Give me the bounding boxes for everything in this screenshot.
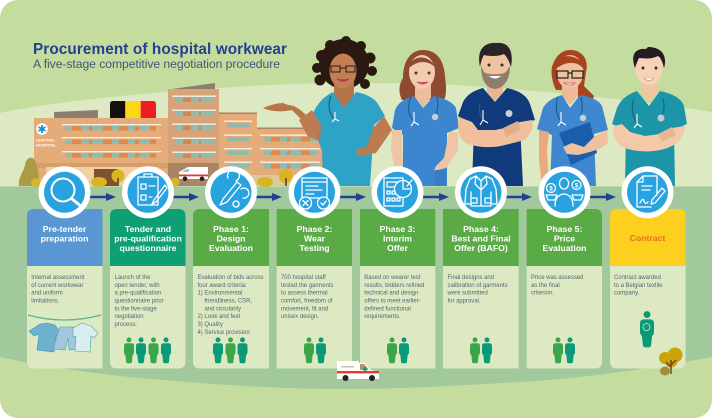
- card: contract: Contract: [630, 233, 665, 243]
- staff pictograms: [124, 337, 171, 363]
- icon: wear test checklist: [288, 166, 340, 218]
- belgian flag: [110, 101, 156, 118]
- card: phase 5: Evaluation: [543, 243, 586, 253]
- card: phase 1: 3) Quality: [198, 322, 223, 328]
- card: phase 5: Phase 5:: [547, 224, 582, 234]
- card: phase 4: Final designs and: [448, 275, 494, 281]
- hospital sign: CENTRAL: [36, 138, 56, 142]
- main wing: [34, 118, 168, 186]
- staff pictograms: [304, 337, 326, 363]
- roof: [54, 110, 98, 118]
- card: tender and pre-qualification questionnaire: [110, 209, 186, 368]
- card: tender and pre-qualification questionnaire: open tender, with: [114, 283, 160, 289]
- card: phase 3: Offer: [387, 243, 408, 253]
- card: phase 2: 700 hospital staff: [281, 275, 326, 281]
- staff pictograms: [387, 337, 409, 363]
- card: phase 5: Price was assessed: [531, 275, 583, 281]
- card: phase 3: Interim: [383, 234, 412, 244]
- tower: [172, 83, 215, 90]
- card: phase 1: 4) Service provision: [198, 330, 250, 336]
- face: [330, 54, 356, 88]
- staff pictograms: [553, 337, 575, 363]
- card: phase 2: Phase 2:: [297, 224, 332, 234]
- card: phase 3: requirements.: [364, 314, 401, 320]
- card: tender and pre-qualification questionnaire: a pre-qualification: [114, 291, 161, 297]
- card: tender and pre-qualification questionnaire: process.: [114, 322, 137, 328]
- tree near contract card: [659, 348, 682, 376]
- icon: lab coat: [455, 166, 507, 218]
- card: phase 2: Testing: [299, 243, 330, 253]
- pictogram: awarded company: [640, 311, 654, 347]
- card: pre-tender preparation: and uniform: [31, 291, 63, 297]
- nurse 4: [537, 50, 608, 186]
- card: tender and pre-qualification questionnaire: to the five-stage: [114, 306, 157, 312]
- hair: [312, 36, 377, 89]
- card: pre-tender preparation: [27, 209, 102, 368]
- hospital sign: [36, 123, 56, 148]
- card: phase 2: unisex design.: [281, 314, 319, 320]
- card: phase 1: friendliness, CSR,: [204, 298, 252, 304]
- card: phase 3: technical and design: [364, 291, 418, 297]
- card: phase 5: Price: [554, 234, 575, 244]
- card: phase 2: comfort, freedom of: [281, 298, 333, 304]
- card: contract: [610, 209, 686, 368]
- card: phase 1: Design: [217, 234, 245, 244]
- pointing arm: [263, 103, 322, 140]
- card: phase 3: defined functional: [364, 306, 411, 312]
- icon: magnifying glass: [38, 166, 90, 218]
- card: pre-tender preparation: Pre-tender: [43, 224, 87, 234]
- card: phase 2: movement, fit and: [281, 306, 328, 312]
- background hill: [0, 83, 712, 190]
- arrow: [506, 193, 532, 201]
- card: phase 2: [277, 209, 352, 368]
- card: phase 4: Phase 4:: [463, 224, 499, 234]
- nurse 3: [458, 43, 535, 186]
- clipboard: [559, 122, 597, 165]
- card: phase 1: Phase 1:: [213, 224, 249, 234]
- card: phase 4: calibration of garments: [448, 283, 508, 289]
- card: phase 4: Best and Final: [451, 234, 511, 244]
- card: phase 1: and circularity: [204, 306, 241, 312]
- card: phase 1: four award criteria:: [198, 283, 247, 289]
- card: phase 1: [193, 209, 269, 368]
- card: tender and pre-qualification questionnaire: questionnaire: [120, 243, 177, 253]
- card: phase 5: as the final: [531, 283, 560, 289]
- card: tender and pre-qualification questionnaire: questionnaire prior: [114, 298, 164, 304]
- icon: price evaluation: $: [549, 186, 553, 192]
- stethoscope: [329, 96, 333, 118]
- icon: design gears and pencil: [205, 166, 257, 218]
- card: pre-tender preparation: of current workwear: [31, 283, 83, 289]
- card: pre-tender preparation: limitations.: [31, 298, 60, 304]
- card: phase 3: Based on wearer test: [364, 275, 421, 281]
- card: phase 4: were submitted: [446, 291, 488, 297]
- arrow: [340, 193, 366, 201]
- ambulance on road: [337, 361, 379, 381]
- card: phase 1: Evaluation of bids across: [198, 275, 264, 281]
- illustration: clothes on a line: [28, 315, 101, 352]
- ground band: [0, 186, 712, 389]
- card: phase 5: criterion.: [531, 291, 554, 297]
- card: contract: to a Belgian textile: [614, 283, 663, 289]
- card: phase 3: [360, 209, 435, 368]
- card: phase 5: [527, 209, 602, 368]
- card: tender and pre-qualification questionnaire: Launch of the: [114, 275, 151, 281]
- glasses: [331, 66, 355, 72]
- arrow: [423, 193, 449, 201]
- hospital building: [34, 83, 329, 186]
- nurse 2: [391, 50, 459, 186]
- subtitle: A five-stage competitive negotiation procedure: [33, 57, 280, 71]
- nurse 5: [612, 47, 687, 186]
- crossed arms: [458, 117, 533, 147]
- card: contract: company.: [614, 291, 640, 297]
- card: pre-tender preparation: preparation: [41, 234, 88, 244]
- card: phase 4: for approval.: [448, 298, 481, 304]
- hip arm: [356, 116, 392, 156]
- card: phase 3: results, bidders refined: [364, 283, 424, 289]
- east wing: [219, 113, 257, 175]
- card: tender and pre-qualification questionnaire: Tender and: [125, 224, 171, 234]
- card: pre-tender preparation: Internal assessment: [31, 275, 85, 281]
- arrow: [590, 193, 616, 201]
- card: phase 4: Offer (BAFO): [454, 243, 508, 253]
- hospital sign: HOSPITAL: [36, 142, 56, 148]
- nurse 1: [263, 36, 392, 186]
- neck: [334, 82, 354, 108]
- card: phase 4: [443, 209, 519, 368]
- card: phase 1: Evaluation: [209, 243, 253, 253]
- staff pictograms: [213, 337, 248, 363]
- arrow: [256, 193, 282, 201]
- staff pictograms: [470, 337, 492, 363]
- title: Procurement of hospital workwear: [33, 41, 287, 58]
- card: phase 2: to assess thermal: [281, 291, 328, 297]
- icon: contract signing: [622, 166, 674, 218]
- icon: calculator and pie chart: [372, 166, 424, 218]
- card: tender and pre-qualification questionnaire: negotiation: [114, 314, 144, 320]
- card: tender and pre-qualification questionnaire: pre-qualification: [114, 234, 182, 244]
- trees and shrubs: [19, 158, 293, 188]
- ambulance at hospital: [179, 167, 208, 181]
- card: phase 1: 1) Environmental: [198, 291, 242, 297]
- icon: clipboard checklist: [122, 166, 174, 218]
- scrubs: [310, 92, 385, 186]
- card: phase 2: tested the garments: [281, 283, 334, 289]
- card: phase 3: offers to meet earlier-: [364, 298, 421, 304]
- card: phase 2: Wear: [304, 234, 326, 244]
- card: phase 1: 2) Look and feel: [198, 314, 240, 320]
- icon: price evaluation: $: [575, 182, 579, 190]
- arrow: [173, 193, 199, 201]
- card: phase 3: Phase 3:: [380, 224, 415, 234]
- arrow: [90, 193, 116, 201]
- title: [33, 41, 287, 71]
- card: contract: Contract awarded: [614, 275, 661, 281]
- icon: price evaluation: [538, 166, 590, 218]
